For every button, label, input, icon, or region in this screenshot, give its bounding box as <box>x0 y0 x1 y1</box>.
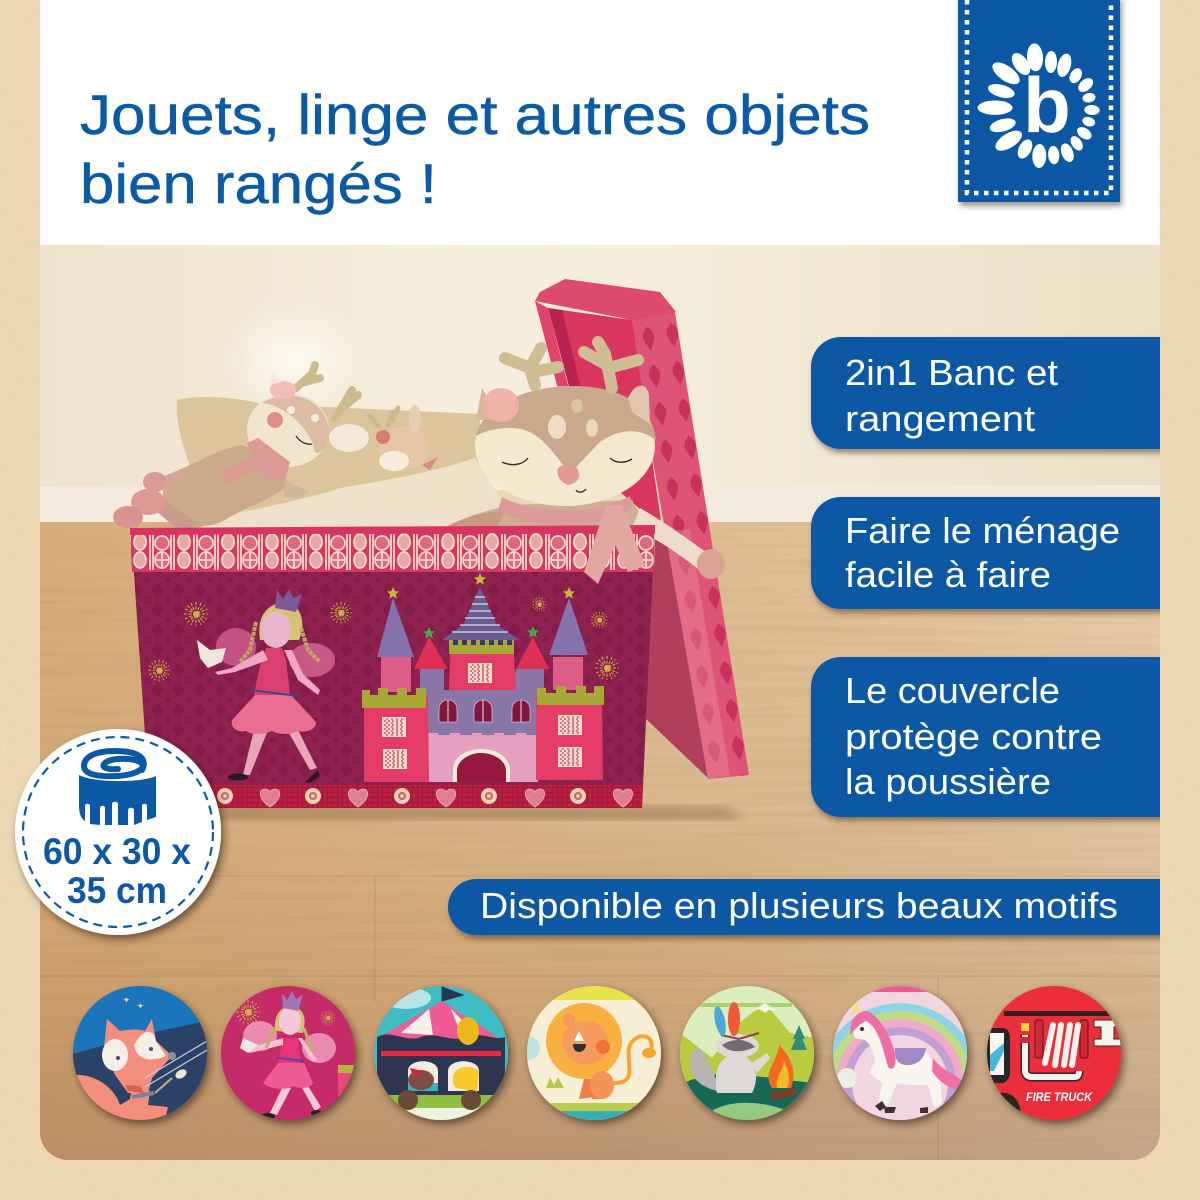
logo flower <box>978 43 1100 168</box>
castle side towers <box>364 697 603 782</box>
lid of box <box>535 279 749 779</box>
wall <box>40 245 1160 490</box>
large deer flower <box>483 388 519 422</box>
pill: dust protection <box>811 657 1170 817</box>
logo tag <box>958 0 1120 202</box>
princess head and hair <box>259 603 302 640</box>
icon: tape measure <box>79 751 156 825</box>
castle stars <box>387 573 575 598</box>
bottom hearts strip <box>210 785 643 808</box>
castle battlements <box>362 686 604 708</box>
large deer head <box>475 386 655 506</box>
large toy deer <box>440 342 725 579</box>
title: Jouets, linge et autres objets <box>80 83 870 146</box>
photo of toy box in room <box>40 245 1170 1162</box>
princess bird <box>197 640 226 668</box>
deer head <box>247 393 329 467</box>
castle center wall <box>420 669 544 735</box>
princess <box>197 589 335 783</box>
pill: bench and storage: 2in1 Banc et <box>845 352 1058 393</box>
motif: fire truck <box>987 986 1121 1120</box>
motif: lion <box>516 986 661 1121</box>
large deer scarf <box>498 496 633 525</box>
box floor shadow <box>150 806 745 820</box>
pill: bench and storage <box>811 337 1170 449</box>
pill: dust protection: Le couvercle <box>845 670 1060 711</box>
pill: bench and storage: rangement <box>845 398 1035 439</box>
deer antlers <box>296 365 358 418</box>
deer ear and flower <box>329 424 369 452</box>
motif: raccoon campfire <box>680 986 814 1120</box>
pill: available patterns: Disponible en plusieurs beaux motifs <box>480 885 1118 926</box>
pill: easy cleaning: Faire le ménage <box>845 510 1120 551</box>
castle square windows <box>382 663 582 769</box>
deer sleeve <box>164 462 197 486</box>
pill: easy cleaning <box>811 497 1170 609</box>
motif: fire truck: FIRE TRUCK <box>1026 1090 1093 1104</box>
motif: princess <box>221 986 355 1120</box>
dimensions text: 60 x 30 x <box>43 831 191 872</box>
box side interior <box>645 528 708 778</box>
large deer nose and face <box>558 464 579 485</box>
castle <box>362 573 604 782</box>
princess crown <box>275 589 302 612</box>
header panel <box>40 0 1160 246</box>
deer leg band <box>158 502 200 528</box>
castle left turret roof <box>377 598 414 657</box>
logo letter b: b <box>1023 61 1071 149</box>
deer feet <box>143 472 167 492</box>
skirting board <box>40 485 1160 523</box>
princess bodice <box>254 648 290 695</box>
scarf over box edge <box>584 505 645 584</box>
toy box front <box>130 525 655 808</box>
castle right turret roof <box>549 598 588 655</box>
motif: fox <box>73 986 207 1120</box>
princess skirt <box>232 694 316 734</box>
castle small red roofs <box>414 637 549 669</box>
princess legs and shoes <box>243 728 317 775</box>
small toy deer lying <box>113 365 369 530</box>
wooden floor <box>40 522 1160 1162</box>
castle door <box>453 749 510 782</box>
dimensions badge <box>15 729 221 935</box>
deer scarf <box>220 438 290 484</box>
motif: circus train <box>374 986 508 1120</box>
dimensions badge: 35 cm <box>67 870 167 911</box>
sparkles <box>148 597 619 681</box>
castle arched windows <box>439 700 530 722</box>
lid inner tray <box>548 308 662 528</box>
pill: dust protection: protège contre <box>845 716 1102 757</box>
box panel <box>131 527 655 808</box>
castle center tower <box>449 653 516 690</box>
large deer antlers <box>505 342 638 388</box>
deer body <box>163 445 288 526</box>
back pillow <box>177 397 480 510</box>
cream cushion <box>197 458 505 532</box>
pill: easy cleaning: facile à faire <box>845 554 1051 595</box>
large deer body <box>448 500 638 526</box>
pill: dust protection: la poussière <box>845 761 1051 802</box>
motif: unicorn <box>824 986 976 1159</box>
pill: available patterns <box>448 879 1170 935</box>
baby toy deer <box>370 405 438 471</box>
title: bien rangés ! <box>80 152 437 215</box>
large deer arm <box>633 508 704 569</box>
lid outer face <box>628 312 749 779</box>
lid top rim <box>535 279 676 320</box>
decorative top band <box>130 532 655 572</box>
princess wings <box>216 628 256 666</box>
title <box>80 83 870 215</box>
large deer ear <box>628 386 650 424</box>
large deer spots <box>548 415 566 439</box>
princess arms <box>215 650 320 695</box>
